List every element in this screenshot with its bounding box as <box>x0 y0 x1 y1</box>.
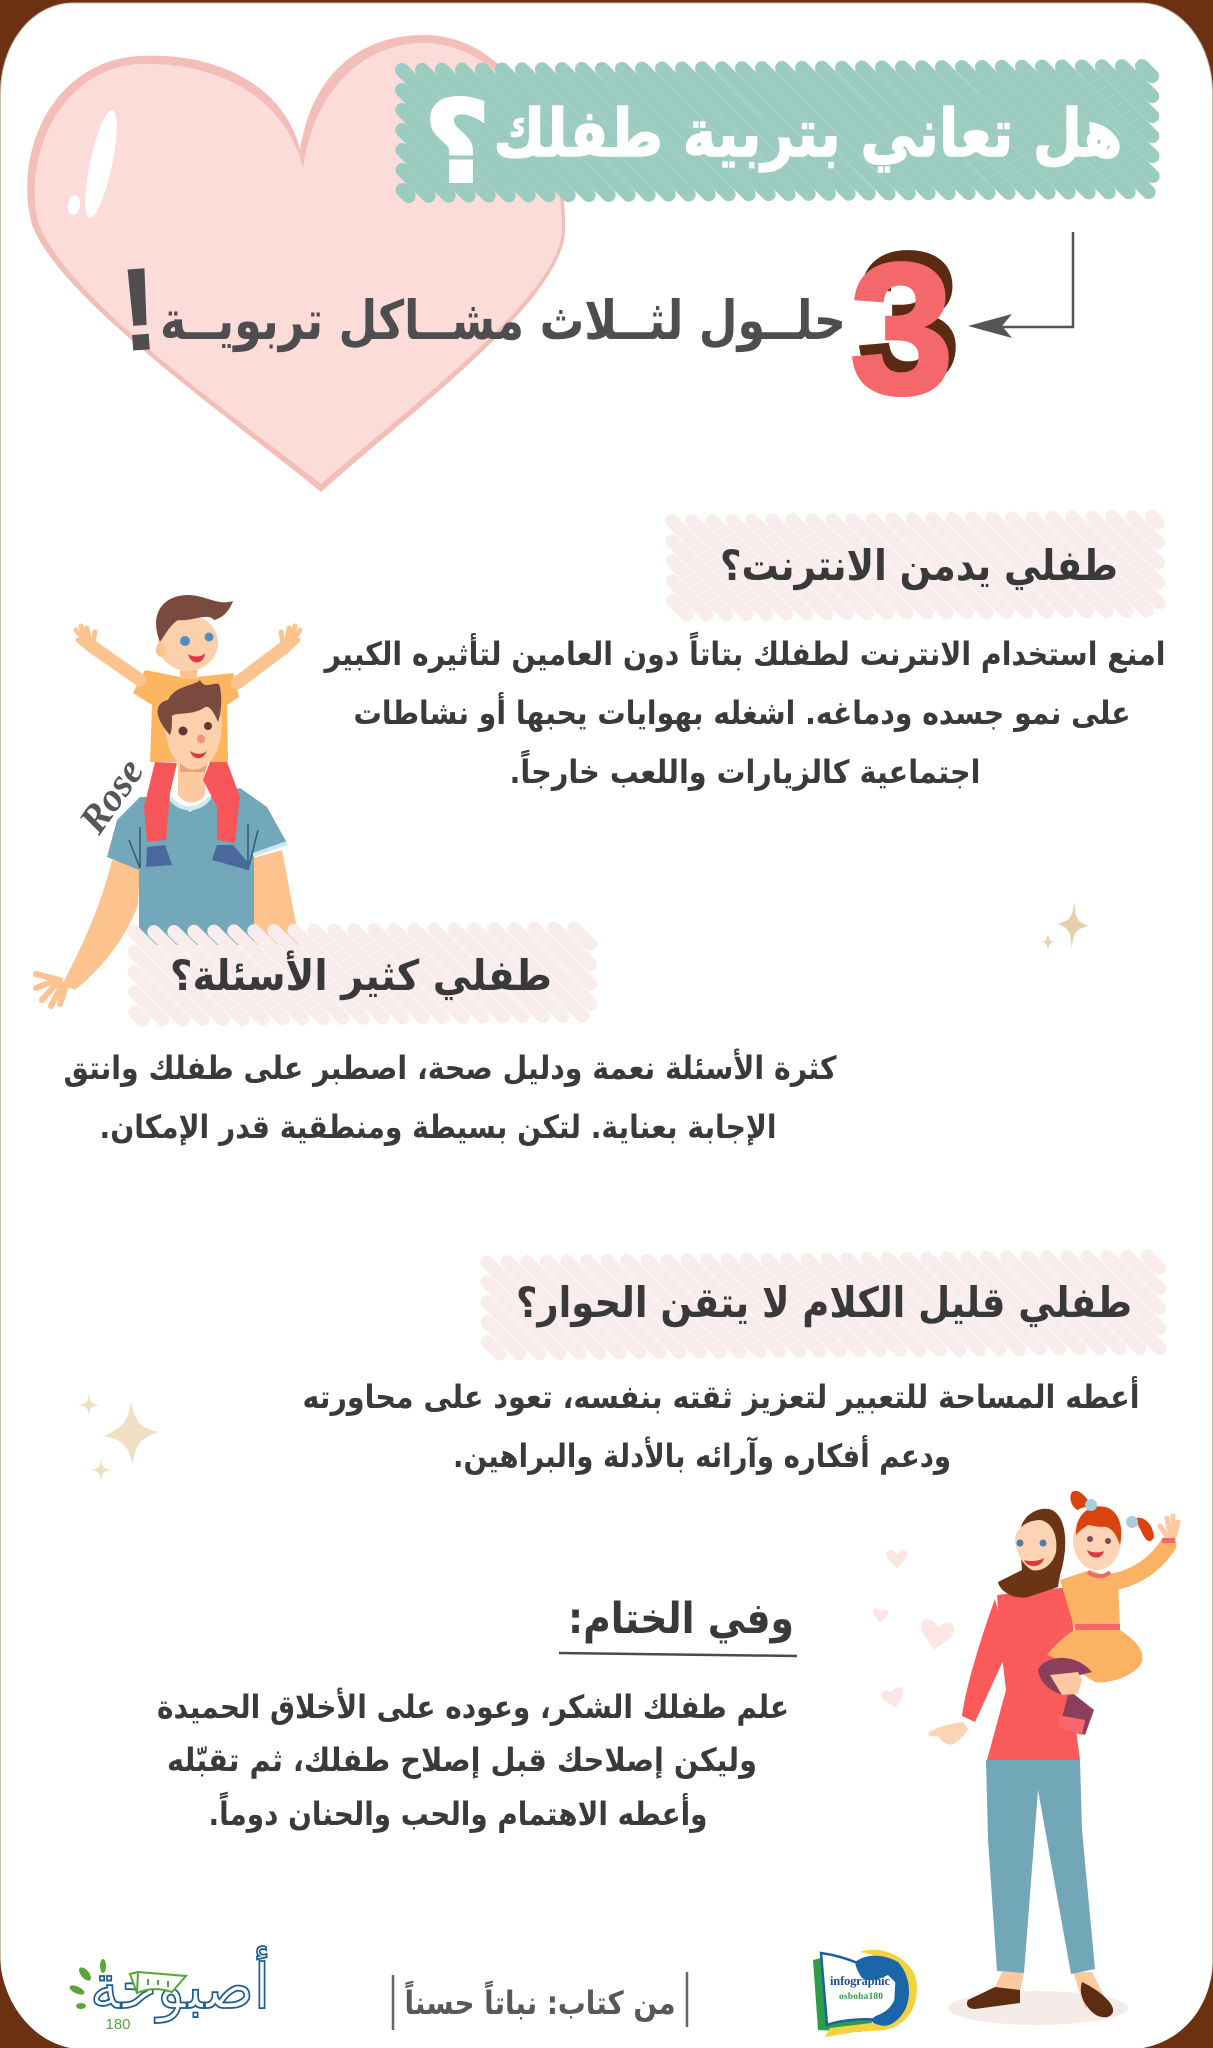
body text: الإجابة بعناية. لتكن بسيطة ومنطقية قدر الإمكان. <box>100 1108 776 1146</box>
subtitle: حلــول لثــلاث مشــاكل تربويــة <box>160 289 846 352</box>
mother shoes <box>967 1987 1020 2009</box>
mother arm and hand <box>962 1599 1008 1722</box>
child arms <box>90 645 285 683</box>
child head <box>180 662 197 679</box>
title text: هل تعاني بتربية طفلك <box>494 95 1122 172</box>
signature: Rose <box>69 750 152 842</box>
body text: ودعم أفكاره وآرائه بالأدلة والبراهين. <box>453 1435 951 1475</box>
girl legs <box>1038 1658 1094 1735</box>
father hair <box>158 680 221 735</box>
body text <box>64 1048 837 1146</box>
logo wordmark: أصبوحة <box>90 1946 270 2023</box>
section 2: many questions <box>64 928 837 1146</box>
ground shadow <box>948 1991 1128 2025</box>
heading: طفلي قليل الكلام لا يتقن الحوار؟ <box>516 1278 1132 1328</box>
logo: osboha 180 <box>68 1946 270 2033</box>
hair flowers <box>1085 1499 1097 1511</box>
conclusion <box>157 1594 797 1833</box>
father arms <box>62 860 140 990</box>
exclamation mark: ! <box>115 243 163 377</box>
mother hand <box>1050 1672 1082 1695</box>
girl dress <box>1047 1570 1143 1682</box>
teal brush band <box>402 66 1153 196</box>
logo: infographic osboha180: osboha180 <box>839 1992 883 2002</box>
source credit: من كتاب: نباتاً حسناً <box>404 1980 676 2022</box>
logo blue wave <box>855 1956 909 2026</box>
body text <box>323 631 1166 791</box>
logo number: 180 <box>105 2016 131 2033</box>
body text: على نمو جسده ودماغه. اشغله بهوايات يحبها أو نشاطات <box>354 692 1130 732</box>
heart background <box>27 35 565 492</box>
body text <box>157 1687 789 1833</box>
body text: اجتماعية كالزيارات واللعب خارجاً. <box>510 749 980 791</box>
body text: كثرة الأسئلة نعمة ودليل صحة، اصطبر على طفلك وانتق <box>64 1048 837 1087</box>
logo book cover <box>813 1958 875 2032</box>
section 1: internet <box>323 517 1166 791</box>
pink brush band <box>672 517 1159 615</box>
big number 3: 3 <box>857 215 960 422</box>
logo building <box>130 1972 186 1993</box>
body text <box>302 1376 1140 1475</box>
mother feet <box>990 1972 1105 2008</box>
child hair <box>156 595 233 642</box>
logo yellow wave <box>825 1950 917 2037</box>
hijab <box>998 1509 1065 1598</box>
child legs <box>144 762 177 842</box>
body text: وليكن إصلاحك قبل إصلاح طفلك، ثم تقبّله <box>167 1741 757 1780</box>
girl hair and face <box>1070 1491 1154 1541</box>
father shirt <box>107 788 287 945</box>
father face <box>178 726 188 736</box>
illustration: mother and daughter <box>928 1491 1178 2025</box>
pink brush band <box>134 928 591 1020</box>
body text: وأعطه الاهتمام والحب والحنان دوماً. <box>208 1791 708 1833</box>
section 3: quiet child <box>302 1256 1160 1475</box>
icon: sparkles right <box>1042 900 1090 950</box>
child shoes <box>146 845 172 867</box>
big number 3: 3 <box>850 226 953 433</box>
logo leaves <box>68 1959 106 2009</box>
illustration: father and son <box>36 595 300 1006</box>
logo book page <box>821 1953 897 2025</box>
body text: علم طفلك الشكر، وعوده على الأخلاق الحميدة <box>157 1687 789 1726</box>
logo: infographic osboha180 <box>813 1950 917 2037</box>
title banner <box>402 66 1153 208</box>
icon: pale hearts <box>871 1550 956 1711</box>
icon: sparkles left <box>78 1393 159 1482</box>
child face <box>180 636 190 646</box>
heading: طفلي كثير الأسئلة؟ <box>170 950 552 1001</box>
father neck <box>178 762 205 802</box>
icon: heart highlight <box>66 108 123 220</box>
mother top <box>987 1587 1080 1760</box>
heading underline <box>559 1653 797 1656</box>
mother trousers <box>986 1760 1095 1974</box>
child shirt <box>133 670 239 762</box>
heading: وفي الختام: <box>568 1594 794 1644</box>
heading: طفلي يدمن الانترنت؟ <box>720 541 1118 591</box>
logo text: infographic <box>830 1974 890 1988</box>
pink brush band <box>487 1256 1160 1354</box>
girl arm <box>1113 1545 1168 1582</box>
arrow <box>968 232 1073 338</box>
subtitle <box>115 243 846 377</box>
source credit <box>393 1972 687 2030</box>
father head <box>165 705 222 768</box>
title question mark: ؟ <box>425 78 489 208</box>
mother face <box>1015 1520 1056 1570</box>
